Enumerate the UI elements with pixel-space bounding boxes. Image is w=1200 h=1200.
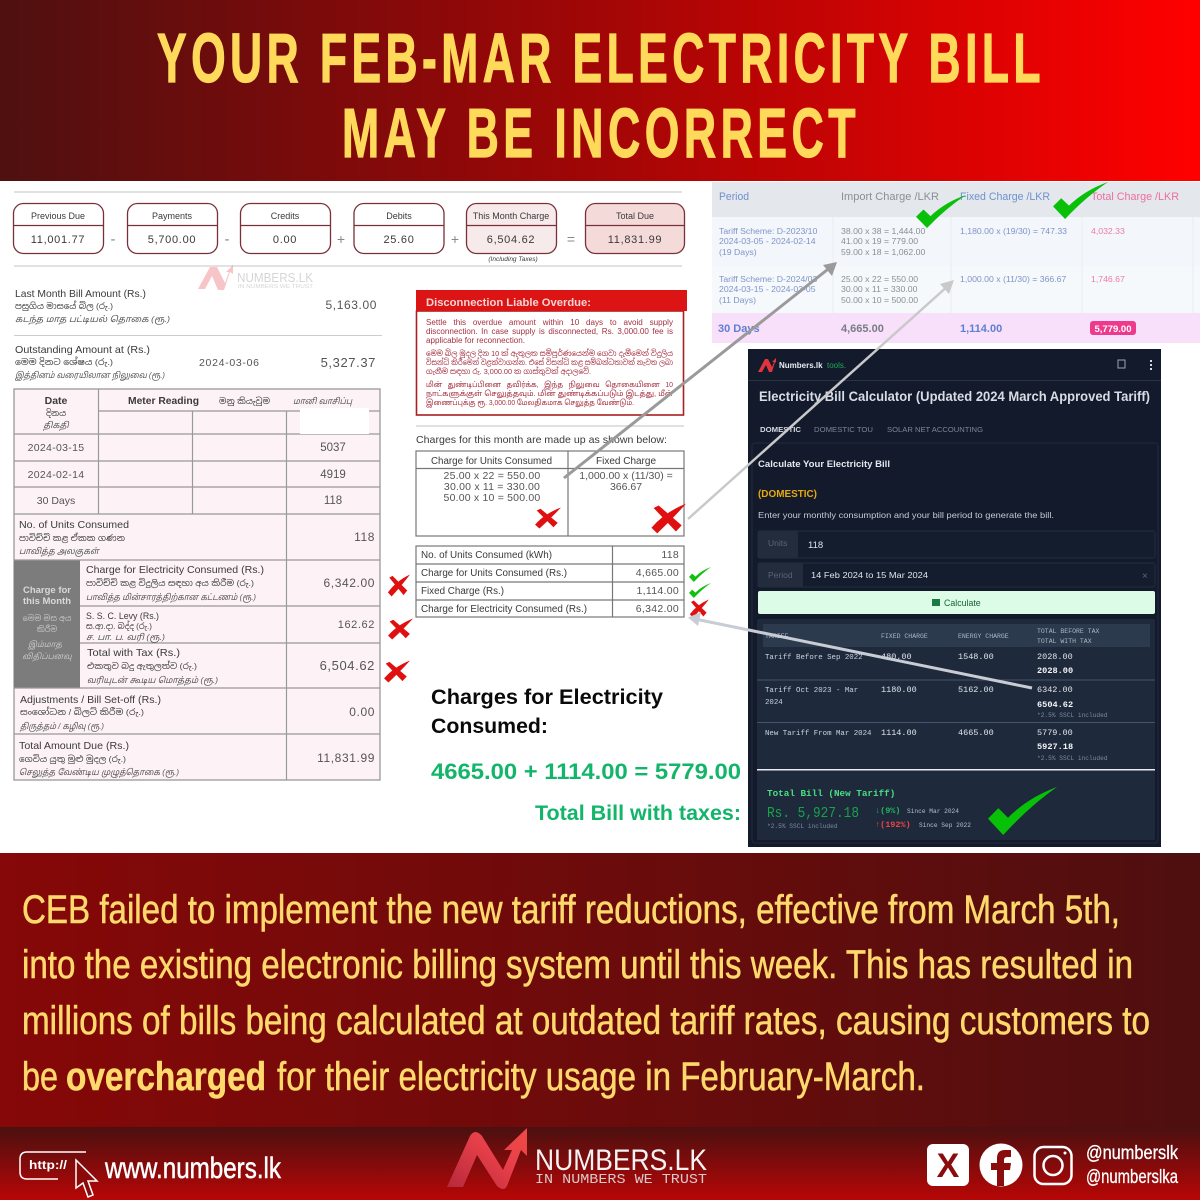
table: charge breakdown: Fixed Charge <box>596 456 656 467</box>
row: units consumed: පාවිච්චි කළ ඒකක ගණන <box>19 532 125 543</box>
meter rows: 118 <box>324 495 342 507</box>
website link: http:// <box>29 1160 68 1172</box>
notice text: Settle this overdue amount within 10 days to avoid supply <box>426 318 673 327</box>
results row: Oct 2023 to Mar 2024: 6504.62 <box>1037 700 1073 710</box>
row: adjustments: Adjustments / Bill Set-off (Rs.) <box>20 694 161 706</box>
panel: scanned electricity bill, account summary: (Including Taxes) <box>488 256 538 263</box>
social handles: @numberslka <box>1086 1167 1178 1188</box>
row: adjustments: திருத்தம் / கழிவு (ரூ.) <box>19 721 104 732</box>
panel: scanned electricity bill, account summary: = <box>567 231 575 247</box>
results row: before Sep 2022: Tariff Before Sep 2022 <box>765 654 863 662</box>
text block: last month and outstanding amounts: පසුගිය මාසයේ බිල (රු.) <box>15 300 113 311</box>
results row: Oct 2023 to Mar 2024 <box>765 685 1108 719</box>
table: units and charges: No. of Units Consumed (kWh) <box>421 550 552 561</box>
results row: before Sep 2022 <box>765 652 1073 676</box>
panel: scanned electricity bill, account summary <box>14 191 684 267</box>
row: units consumed <box>19 519 375 557</box>
row: charge for electricity consumed: பாவித்த மின்சாரத்திற்கான கட்டணம் (ரூ.) <box>86 592 256 603</box>
table: units and charges: Fixed Charge (Rs.) <box>421 586 504 597</box>
text block: last month and outstanding amounts: Outstanding Amount at (Rs.) <box>15 344 150 356</box>
calculator tabs: SOLAR NET ACCOUNTING <box>887 425 983 434</box>
label: charge for this month: Charge for <box>23 585 71 596</box>
calculator title: Electricity Bill Calculator (Updated 2024 March Approved Tariff) <box>759 389 1150 404</box>
footer <box>0 1127 1200 1200</box>
row: total with tax: Total with Tax (Rs.) <box>87 647 180 659</box>
label: charge for this month: விதிப்பனவு <box>22 652 72 662</box>
row: SSC levy: ச. பா. ப. வரி (ரூ.) <box>86 632 165 643</box>
panel: electricity bill calculator <box>748 349 1161 847</box>
panel: tariff period table <box>712 182 1200 343</box>
watermark logo: IN NUMBERS WE TRUST <box>238 284 313 290</box>
table: units and charges: Charge for Units Consumed (Rs.) <box>421 568 567 579</box>
panel: scanned electricity bill, account summary: + <box>337 231 345 247</box>
results row: before Sep 2022: 2028.00 <box>1037 652 1073 662</box>
website link: www.numbers.lk <box>104 1152 282 1185</box>
results row: new tariff: *2.5% SSCL included <box>1037 755 1108 762</box>
table header: Period <box>719 191 749 203</box>
meter rows: 5037 <box>320 442 346 454</box>
total bill summary <box>767 788 971 830</box>
table: charge breakdown: 30.00 x 11 = 330.00 <box>444 481 540 493</box>
table header: திகதி <box>42 420 70 431</box>
icon: red crosses beside bill charges <box>384 574 413 683</box>
brand logo <box>447 1128 707 1189</box>
notice heading: Disconnection Liable Overdue: <box>426 297 591 309</box>
row: tariff scheme D-2024/03: 2024-03-15 - 2024-03-05 <box>719 284 816 294</box>
input: units <box>758 531 1155 558</box>
notice text: disconnection. In case supply is disconnected, Rs. 3,000.00 fee is <box>426 327 673 336</box>
explanation text: be <box>22 1055 58 1099</box>
label: charge for this month: இம்மாத <box>28 640 62 650</box>
row: total with tax: 6,504.62 <box>320 658 375 673</box>
row: SSC levy <box>86 611 375 643</box>
explanation text: overcharged <box>66 1055 266 1099</box>
button: calculate: Calculate <box>944 598 981 608</box>
text: charges intro: Charges for this month are made up as shown below: <box>416 434 667 446</box>
calculator nav bar <box>758 358 1152 372</box>
results row: new tariff: New Tariff From Mar 2024 <box>765 730 872 738</box>
meter reading and charges table <box>14 389 380 780</box>
table header: மானி வாசிப்பு <box>293 396 353 407</box>
results row: Oct 2023 to Mar 2024: 5162.00 <box>958 685 994 695</box>
row: total with tax <box>87 647 375 686</box>
table header: Meter Reading <box>128 395 199 407</box>
icon: large green check <box>988 787 1057 835</box>
row: adjustments: 0.00 <box>349 705 375 719</box>
results row: before Sep 2022: 2028.00 <box>1037 666 1073 676</box>
notice text <box>426 318 673 408</box>
table header: Import Charge /LKR <box>841 191 939 203</box>
total bill summary: *2.5% SSCL included <box>767 823 838 830</box>
panel: scanned electricity bill, account summary: 6,504.62 <box>487 234 535 246</box>
total bill summary: Since Sep 2022 <box>919 822 971 829</box>
results row: before Sep 2022: 480.00 <box>881 652 912 662</box>
calculator tabs: DOMESTIC TOU <box>814 425 873 434</box>
row: SSC levy: 162.62 <box>338 619 375 631</box>
icon: X <box>927 1144 969 1186</box>
watermark logo <box>198 265 313 290</box>
calculator tabs <box>760 425 983 434</box>
input: period: Period <box>768 570 793 580</box>
label: charge for this month: කිරීම <box>37 624 57 634</box>
icon: crosses <box>535 504 686 533</box>
input: period: × <box>1142 571 1148 582</box>
calculator tabs: DOMESTIC <box>760 425 802 434</box>
results header: TOTAL WITH TAX <box>1037 638 1092 645</box>
results row: before Sep 2022: 1548.00 <box>958 652 994 662</box>
row: charge for electricity consumed <box>86 564 375 603</box>
row: total amount due: 11,831.99 <box>317 751 375 765</box>
label: charge for this month <box>22 585 72 662</box>
total bill summary: Total Bill (New Tariff) <box>767 788 895 799</box>
brand logo: NUMBERS.LK <box>535 1144 707 1177</box>
row: total with tax: එකතුව බදු ඇතුලත්ව (රු.) <box>87 660 197 671</box>
text: charges for electricity consumed calculation: Charges for Electricity <box>431 686 663 709</box>
row: tariff scheme D-2023/10 <box>719 226 1125 257</box>
results row: new tariff: 1114.00 <box>881 728 917 738</box>
table header: Date <box>45 395 68 407</box>
results row: Oct 2023 to Mar 2024: 6342.00 <box>1037 685 1073 695</box>
calculator intro: Enter your monthly consumption and your bill period to generate the bill. <box>758 510 1054 520</box>
row: units consumed: 118 <box>354 530 375 544</box>
input: period: 14 Feb 2024 to 15 Mar 2024 <box>811 570 928 580</box>
row: tariff scheme D-2024/03: 30.00 x 11 = 330.00 <box>841 284 918 294</box>
results row: new tariff <box>765 728 1108 762</box>
row: SSC levy: ස.ආ.දා. බද්ද (රු.) <box>86 620 152 631</box>
table: charge breakdown <box>416 451 686 536</box>
row: totals: 30 Days <box>718 323 760 335</box>
text block: last month and outstanding amounts: 5,163.00 <box>325 298 377 312</box>
calculator intro <box>758 459 1054 520</box>
row: total amount due: Total Amount Due (Rs.) <box>19 740 129 752</box>
button: calculate <box>758 591 1155 614</box>
input: units: 118 <box>808 540 823 551</box>
label: charge for this month: this Month <box>23 596 71 607</box>
row: charge for electricity consumed: පාවිච්චි කළ විදුලිය සඳහා අය කිරීම (රු.) <box>86 578 254 588</box>
table: charge breakdown: 366.67 <box>610 481 642 493</box>
row: tariff scheme D-2024/03: 1,000.00 x (11/30) = 366.67 <box>960 274 1067 284</box>
text block: last month and outstanding amounts: கடந்த மாத பட்டியல் தொகை (ரூ.) <box>15 314 170 325</box>
text: charges for electricity consumed calculation: Total Bill with taxes: <box>535 801 741 825</box>
row: adjustments <box>19 694 375 732</box>
row: tariff scheme D-2024/03: Tariff Scheme: D-2024/03 <box>719 274 818 284</box>
calculator nav bar: Numbers.lk <box>779 361 823 370</box>
table: units and charges: 4,665.00 <box>636 567 679 579</box>
panel: scanned electricity bill, account summary: This Month Charge <box>473 211 549 221</box>
arrow: units charge to import charge <box>564 262 837 478</box>
notice text: මෙම බිල මුදල දින 10 ක් ඇතුලත සම්පූර්ණයෙන්ම ගෙවා දැමීමෙන් විදුලිය <box>426 348 673 358</box>
total bill summary: ↑(192%) <box>875 820 911 830</box>
results row: Oct 2023 to Mar 2024: *2.5% SSCL included <box>1037 712 1108 719</box>
table header: Fixed Charge /LKR <box>960 191 1050 203</box>
table: units and charges: 1,114.00 <box>636 585 679 597</box>
table header: Total Charge /LKR <box>1091 191 1179 203</box>
meter rows <box>28 442 346 507</box>
explanation text: for their electricity usage in February-March. <box>277 1055 925 1099</box>
panel: scanned electricity bill, account summary: Debits <box>386 211 412 221</box>
watermark logo: NUMBERS.LK <box>237 270 313 285</box>
row: adjustments: සංශෝධන / බිලට් කිරීම (රු.) <box>20 706 144 717</box>
row: units consumed: பாவித்த அலகுகள் <box>19 546 101 557</box>
icon: green checks and red cross <box>689 567 711 618</box>
panel: scanned electricity bill, account summary: + <box>451 231 459 247</box>
table: charge breakdown: 1,000.00 x (11/30) = <box>579 470 673 482</box>
results header: TARIFF <box>765 633 789 640</box>
icon: Instagram <box>1034 1147 1072 1184</box>
notice text: நாட்களுக்குள் செலுத்தவும். மின் துண்டிக்கப்படும் இடத்து, மீள் <box>426 389 673 399</box>
row: totals: 5,779.00 <box>1095 324 1131 335</box>
notice heading <box>416 290 687 311</box>
row: total amount due: ගෙවිය යුතු මුළු මුදල (රු.) <box>19 754 126 764</box>
text block: last month and outstanding amounts: இத்தினம் வரையிலான நிலுவை (ரூ.) <box>15 370 165 381</box>
row: tariff scheme D-2024/03: (11 Days) <box>719 295 756 305</box>
row: charge for electricity consumed: Charge for Electricity Consumed (Rs.) <box>86 564 264 576</box>
results row: new tariff: 5779.00 <box>1037 728 1073 738</box>
results header <box>765 628 1100 645</box>
text: charges for electricity consumed calculation <box>431 686 741 825</box>
total bill summary: ↓(9%) <box>875 806 901 816</box>
panel: scanned electricity bill, account summary: Total Due <box>616 211 654 221</box>
arrow: calculator total to bill charge <box>688 612 1032 688</box>
table: units and charges: 118 <box>661 549 679 561</box>
row: totals: 4,665.00 <box>841 323 884 335</box>
row: charge for electricity consumed: 6,342.00 <box>323 576 375 590</box>
panel: scanned electricity bill, account summary: 11,831.99 <box>608 234 662 246</box>
row: tariff scheme D-2023/10: 2024-03-05 - 2024-02-14 <box>719 236 816 246</box>
table: units and charges: Charge for Electricity Consumed (Rs.) <box>421 604 587 615</box>
social handles <box>1086 1143 1178 1188</box>
results row: Oct 2023 to Mar 2024: 2024 <box>765 699 783 707</box>
icon: X: X <box>937 1147 960 1185</box>
panel: scanned electricity bill, account summary: - <box>110 231 116 248</box>
table: units and charges <box>416 546 711 618</box>
row: tariff scheme D-2023/10: 59.00 x 18 = 1,062.00 <box>841 247 925 257</box>
row: tariff scheme D-2023/10: 38.00 x 38 = 1,444.00 <box>841 226 925 236</box>
row: tariff scheme D-2023/10: 1,180.00 x (19/30) = 747.33 <box>960 226 1067 236</box>
calculator nav bar: tools. <box>827 361 846 370</box>
text: charges for electricity consumed calculation: Consumed: <box>431 715 548 738</box>
panel: disconnection notice <box>416 290 687 415</box>
title <box>157 19 1045 172</box>
brand logo: IN NUMBERS WE TRUST <box>535 1172 707 1188</box>
table header: මනු කියැවුම <box>219 396 270 406</box>
results row: new tariff: 5927.18 <box>1037 742 1073 752</box>
panel: scanned electricity bill, account summary: 0.00 <box>273 234 297 246</box>
icon: Facebook <box>980 1144 1022 1186</box>
table: charge breakdown: 25.00 x 22 = 550.00 <box>444 470 540 482</box>
text block: last month and outstanding amounts: 2024-03-06 <box>199 357 259 369</box>
panel: scanned electricity bill, account summary: Credits <box>271 211 300 221</box>
social handles: @numberslk <box>1086 1143 1178 1164</box>
table header: දිනය <box>46 408 66 418</box>
text block: last month and outstanding amounts <box>14 288 382 381</box>
table header <box>719 191 1179 203</box>
row: tariff scheme D-2024/03: 50.00 x 10 = 500.00 <box>841 295 918 305</box>
text block: last month and outstanding amounts: Last Month Bill Amount (Rs.) <box>15 288 146 300</box>
panel: scanned electricity bill, account summary: 25.60 <box>383 234 415 246</box>
panel: scanned electricity bill, account summary: Previous Due <box>31 211 85 221</box>
arrow: fixed charge to fixed charge column <box>688 280 954 519</box>
calculator intro: Calculate Your Electricity Bill <box>758 459 890 469</box>
row: tariff scheme D-2023/10: Tariff Scheme: D-2023/10 <box>719 226 818 236</box>
results row: Oct 2023 to Mar 2024: Tariff Oct 2023 - Mar <box>765 687 858 695</box>
results header: ENERGY CHARGE <box>958 633 1009 640</box>
notice text: ගැනීම සඳහා රු. 3,000.00 ක ගාස්තුවක් අදාලවේ. <box>426 366 591 376</box>
row: tariff scheme D-2023/10: (19 Days) <box>719 247 757 257</box>
input: period <box>758 563 1155 587</box>
icon: green checks <box>916 182 1108 228</box>
title: MAY BE INCORRECT <box>342 94 860 172</box>
row: total with tax: வரியுடன் கூடிய மொத்தம் (ரூ.) <box>87 675 218 686</box>
results row: Oct 2023 to Mar 2024: 1180.00 <box>881 685 917 695</box>
row: totals <box>718 321 1136 335</box>
row: tariff scheme D-2024/03 <box>719 274 1125 305</box>
row: SSC levy: S. S. C. Levy (Rs.) <box>86 611 159 622</box>
input: units: Units <box>768 538 787 548</box>
row: tariff scheme D-2023/10: 41.00 x 19 = 779.00 <box>841 236 918 246</box>
table header <box>42 395 353 431</box>
results row: new tariff: 4665.00 <box>958 728 994 738</box>
panel: scanned electricity bill, account summary: 5,700.00 <box>148 234 196 246</box>
row: tariff scheme D-2024/03: 1,746.67 <box>1091 274 1125 284</box>
panel: scanned electricity bill, account summary: 11,001.77 <box>31 234 85 246</box>
meter rows: 2024-03-15 <box>28 442 84 454</box>
notice text: மின் துண்டிப்பினை தவிர்க்க, இந்த நிலுவை தொகையினை 10 <box>426 380 673 390</box>
row: units consumed: No. of Units Consumed <box>19 519 129 531</box>
table: charge breakdown: Charge for Units Consumed <box>431 456 552 467</box>
meter rows: 30 Days <box>37 495 75 507</box>
text: charges for electricity consumed calculation: 4665.00 + 1114.00 = 5779.00 <box>431 759 741 784</box>
explanation text <box>22 888 1150 1099</box>
table: charge breakdown: 50.00 x 10 = 500.00 <box>444 492 540 504</box>
total bill summary: Rs. 5,927.18 <box>767 806 859 822</box>
row: tariff scheme D-2023/10: 4,032.33 <box>1091 226 1125 236</box>
text block: last month and outstanding amounts: 5,327.37 <box>321 355 376 370</box>
header banner <box>0 0 1200 181</box>
notice text: විසන්ධි කිරීමෙන් වළක්වාගන්න. එසේ විසන්ධි කළ සම්බන්ධතාවක් නැවත ලබා <box>426 357 673 367</box>
calculator intro: (DOMESTIC) <box>758 489 817 500</box>
notice text: applicable for reconnection. <box>426 336 525 345</box>
meter rows: 2024-02-14 <box>28 469 84 481</box>
meter rows: 4919 <box>320 469 346 481</box>
notice text: இணைப்புக்கு ரூ. 3,000.00 மேலதிகமாக செலுத்த வேண்டும். <box>426 398 634 408</box>
results header: TOTAL BEFORE TAX <box>1037 628 1100 635</box>
results header: FIXED CHARGE <box>881 633 928 640</box>
row: totals: 1,114.00 <box>960 323 1002 335</box>
text block: last month and outstanding amounts: මෙම දිනට ශේෂය (රු.) <box>15 356 113 367</box>
panel: scanned electricity bill, account summary: Payments <box>152 211 193 221</box>
panel: scanned electricity bill, account summary: - <box>224 231 230 248</box>
row: tariff scheme D-2024/03: 25.00 x 22 = 550.00 <box>841 274 918 284</box>
results table <box>757 619 1155 840</box>
panel: explanation <box>0 853 1200 1127</box>
row: total amount due <box>19 740 375 778</box>
website link <box>20 1152 282 1197</box>
row: total amount due: செலுத்த வேண்டிய முழுத்தொகை (ரூ.) <box>19 767 179 778</box>
total bill summary: Since Mar 2024 <box>907 808 959 815</box>
table: units and charges: 6,342.00 <box>636 603 679 615</box>
label: charge for this month: මෙම මස අය <box>23 614 72 623</box>
